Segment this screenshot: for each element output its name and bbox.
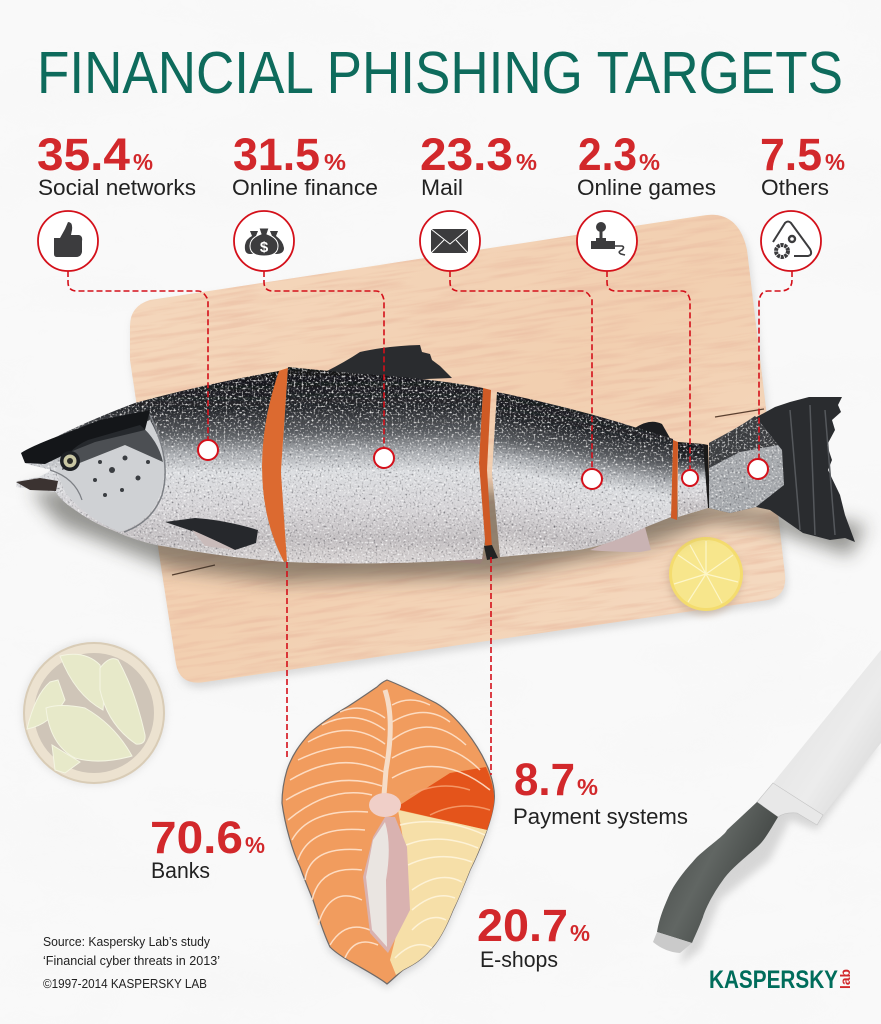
knife: [653, 650, 881, 965]
bay leaves bowl: [22, 641, 166, 785]
dashed connector lines: [68, 271, 792, 775]
leaves: [27, 654, 145, 773]
stat: online games: Online games: [577, 175, 716, 200]
icon: money bags: [234, 211, 294, 271]
stat: payment systems: %: [577, 774, 598, 800]
stat: online games: %: [639, 149, 660, 175]
gill plate: [56, 420, 164, 532]
source note: Source: Kaspersky Lab’s study: [43, 934, 210, 949]
source note: [43, 934, 220, 991]
salmon steak: [282, 680, 494, 988]
stat: banks: [150, 812, 265, 883]
stat: others: [760, 129, 845, 200]
source note: ‘Financial cyber threats in 2013’: [43, 953, 220, 968]
stat: mail: [420, 129, 537, 200]
stat: mail: %: [516, 149, 537, 175]
fish shadow: [30, 480, 866, 582]
fish: fins: [325, 345, 670, 564]
logo: KASPERSKY: [709, 966, 838, 994]
fish: tail section: [709, 397, 855, 542]
stat: payment systems: [513, 754, 688, 829]
icon: envelope: [420, 211, 480, 271]
icon: thumbs up: [38, 211, 98, 271]
stat: online finance: Online finance: [232, 175, 378, 200]
stat: social networks: [37, 129, 196, 200]
logo: lab: [837, 969, 853, 989]
stat: banks: Banks: [151, 858, 210, 883]
cutting board: [130, 214, 790, 690]
stat: e-shops: E-shops: [480, 947, 558, 972]
stat: mail: 23.3: [420, 129, 513, 180]
fish: rear section: [492, 392, 673, 557]
pectoral fin: [165, 518, 258, 550]
cream slice: e-shops: [390, 810, 487, 975]
stat: online finance: 31.5: [233, 129, 320, 180]
source note: ©1997-2014 KASPERSKY LAB: [43, 976, 207, 991]
stat: others: 7.5: [760, 129, 822, 180]
belly cavity: [363, 817, 410, 953]
stat: online finance: %: [324, 149, 346, 175]
stat: e-shops: %: [570, 920, 590, 946]
dark orange slice: payment systems: [400, 767, 494, 830]
icon: triangle and gears: [761, 211, 821, 271]
stat: online finance: [232, 129, 378, 200]
muscle lines: [286, 700, 490, 958]
icon: joystick: [577, 211, 637, 271]
stat: others: Others: [761, 175, 829, 200]
eye: [60, 451, 80, 471]
stat: e-shops: [477, 900, 590, 972]
stat: payment systems: Payment systems: [513, 804, 688, 829]
stat: payment systems: 8.7: [514, 754, 575, 805]
mouth: [16, 478, 58, 491]
stat: mail: Mail: [421, 175, 463, 200]
icon: money bags: $: [260, 239, 269, 256]
stat: social networks: %: [133, 149, 153, 175]
fish marker dots: [198, 440, 768, 489]
stat: online games: [577, 129, 716, 200]
fish: middle section: [281, 367, 485, 563]
stat: banks: %: [245, 832, 265, 858]
fish: head section: [16, 371, 284, 562]
stat: others: %: [825, 149, 845, 175]
lemon slice: [668, 537, 743, 615]
stat: e-shops: 20.7: [477, 900, 568, 951]
head spots: [93, 456, 150, 497]
stat: banks: 70.6: [150, 812, 243, 863]
red cut flesh strips: [262, 368, 710, 562]
fish: small section: [678, 442, 708, 517]
stat: social networks: 35.4: [37, 129, 130, 180]
stat: online games: 2.3: [578, 129, 637, 180]
stat: social networks: Social networks: [38, 175, 196, 200]
spine: [369, 793, 401, 817]
